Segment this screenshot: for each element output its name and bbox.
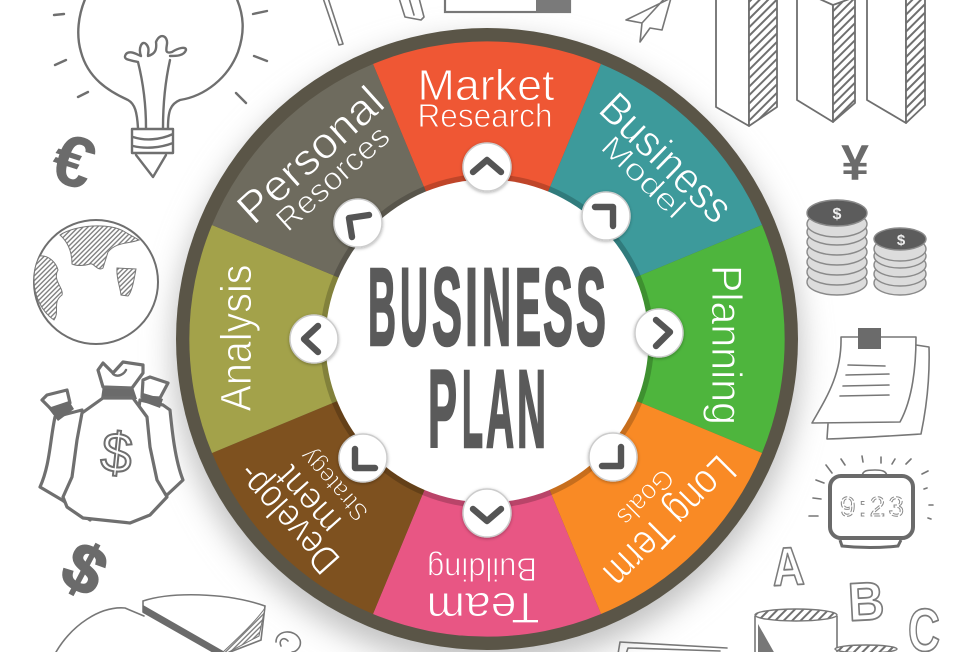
wheel: S bbox=[576, 246, 606, 369]
title: U bbox=[400, 246, 428, 369]
label: market research: Research bbox=[418, 97, 552, 134]
label: market research bbox=[418, 61, 554, 134]
icon: coin stacks: $ bbox=[897, 232, 906, 249]
segment: planning bbox=[487, 225, 785, 453]
title: S bbox=[432, 246, 462, 369]
inner shadow ring bbox=[320, 174, 654, 508]
title: E bbox=[515, 246, 541, 369]
title: L bbox=[462, 348, 483, 471]
icon: cylinder bars bbox=[755, 609, 897, 652]
wheel shadow bbox=[173, 39, 801, 652]
segment: long term goals bbox=[487, 339, 762, 614]
segment: team building bbox=[373, 339, 601, 637]
icon: coin stacks bbox=[807, 200, 926, 295]
button: left bbox=[290, 315, 338, 363]
label: planning: Planning bbox=[702, 265, 750, 425]
icon: money bags bbox=[40, 362, 183, 523]
button: down right bbox=[589, 433, 637, 481]
icon: notes bbox=[812, 328, 929, 439]
title: S bbox=[543, 246, 573, 369]
title: A bbox=[486, 348, 514, 471]
label: business model: Model bbox=[594, 130, 692, 225]
label: analysis: Analysis bbox=[212, 264, 261, 412]
button: up bbox=[463, 143, 511, 191]
button: up right bbox=[582, 192, 630, 240]
icon: euro sign: € bbox=[42, 118, 105, 206]
title: B bbox=[368, 246, 396, 369]
icon: pie chart bbox=[56, 595, 300, 652]
button: right bbox=[635, 309, 683, 357]
segment: market research bbox=[373, 41, 601, 339]
icon: coin stacks: $ bbox=[833, 206, 842, 223]
icon: paper airplane bbox=[626, 0, 671, 42]
label: team building: Team bbox=[426, 583, 540, 632]
segment: personal resources bbox=[212, 64, 487, 339]
icon: bottom frame bbox=[618, 642, 727, 652]
icon: top box bbox=[445, 0, 571, 13]
label: development strategy: ment bbox=[267, 456, 350, 543]
label: development strategy bbox=[227, 421, 385, 582]
icon: light bulb bbox=[54, 0, 267, 177]
label: long term goals: Long Term bbox=[593, 445, 745, 597]
button: down left bbox=[339, 434, 387, 482]
wheel bbox=[176, 28, 798, 650]
icon: letter B: B bbox=[847, 571, 886, 633]
icon: digital clock bbox=[809, 456, 933, 548]
segment: analysis bbox=[189, 225, 487, 453]
label: long term goals: Goals bbox=[611, 463, 680, 532]
title: N bbox=[482, 246, 511, 369]
title bbox=[368, 246, 606, 471]
bar chart doodle bbox=[716, 0, 925, 126]
label: personal resources: Resorces bbox=[269, 118, 397, 238]
centre circle bbox=[326, 180, 648, 502]
icon: pencil bbox=[323, 0, 343, 45]
label: team building: Building bbox=[427, 551, 537, 588]
icon: eraser bbox=[399, 0, 424, 20]
title: N bbox=[517, 348, 546, 471]
segment: business model bbox=[487, 64, 762, 339]
label: market research: Market bbox=[418, 61, 554, 110]
label: personal resources: Personal bbox=[227, 77, 394, 234]
segment: development strategy bbox=[212, 339, 487, 614]
label: business model: Business bbox=[590, 83, 742, 233]
icon: dollar sign: $ bbox=[50, 527, 119, 612]
outer ring bbox=[176, 28, 798, 650]
label: development strategy: Strategy bbox=[294, 442, 374, 527]
icon: globe bbox=[34, 220, 158, 344]
icon: yen sign: ¥ bbox=[841, 135, 869, 191]
icon: digital clock: 9:23 bbox=[840, 491, 904, 522]
button: down bbox=[463, 489, 511, 537]
label: development strategy: Develop- bbox=[227, 454, 349, 582]
label: team building bbox=[426, 551, 540, 632]
icon: letter A: A bbox=[771, 536, 806, 598]
title: I bbox=[465, 246, 478, 369]
button: up left bbox=[334, 199, 382, 247]
icon: money bags: $ bbox=[98, 420, 136, 485]
title: P bbox=[428, 348, 457, 471]
